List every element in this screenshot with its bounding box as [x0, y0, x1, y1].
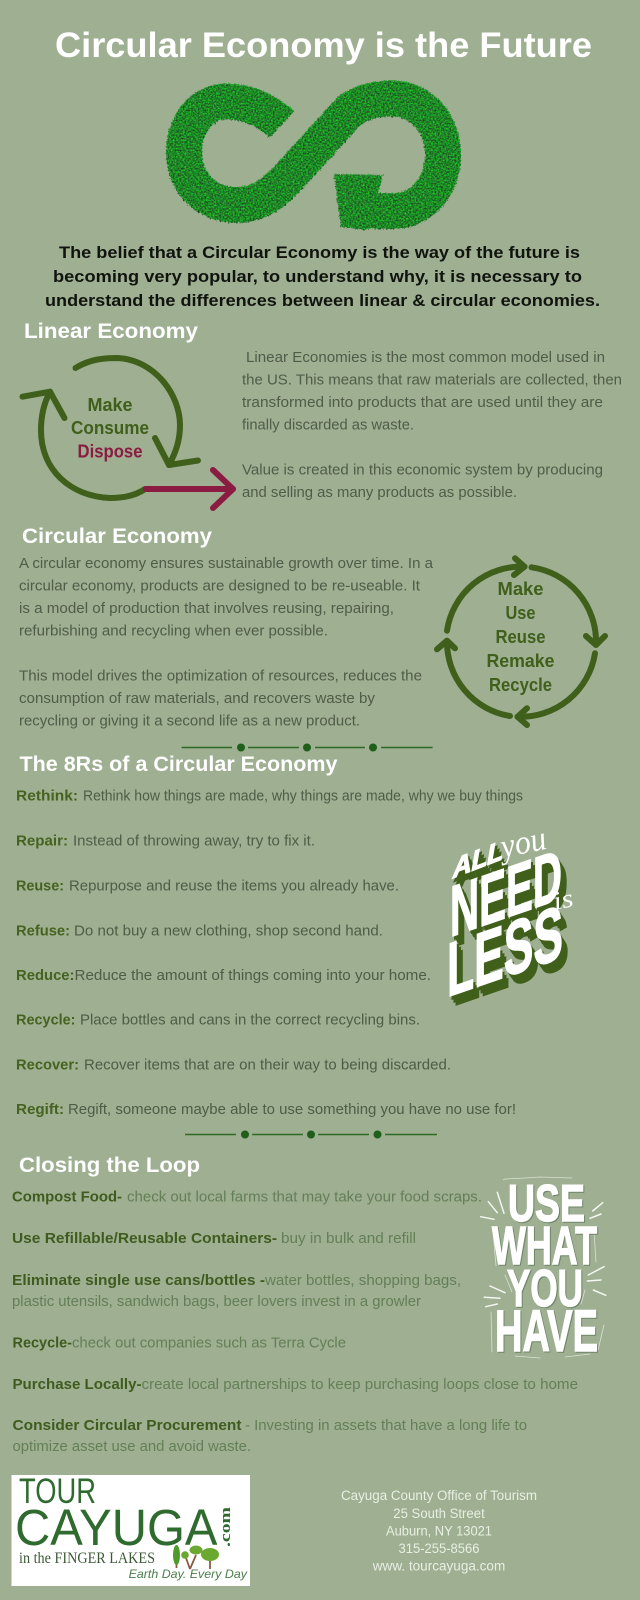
item: reduce: Reduce the amount of things coming into your home.: [74, 967, 431, 984]
contact details: 25 South Street: [393, 1506, 485, 1521]
diagram labels: Reuse: [496, 627, 546, 647]
diagram labels: [71, 395, 149, 462]
text: linear economy description: [242, 349, 622, 501]
diagram labels: Make: [88, 395, 132, 415]
text: linear economy description: Value is created in this economic system by producing: [242, 462, 603, 478]
lettering: all you need is less: LESS: [447, 888, 563, 1014]
item: circular procurement: optimize asset use and avoid waste.: [12, 1438, 251, 1455]
item: circular procurement: [12, 1417, 527, 1455]
intro paragraph: understand the differences between linear & circular economies.: [45, 291, 600, 310]
heading: closing the loop: Closing the Loop: [19, 1154, 200, 1177]
lettering: script words: [494, 820, 576, 916]
diagram labels: [486, 579, 554, 695]
diagram labels: Recycle: [489, 675, 552, 695]
item: reuse: Reuse:: [16, 878, 64, 894]
item: eliminate single use: Eliminate single use cans/bottles -: [12, 1272, 265, 1289]
logo: tour cayuga: in the FINGER LAKES: [19, 1550, 155, 1567]
item: purchase locally: create local partnerships to keep purchasing loops close to home: [142, 1376, 578, 1393]
text: linear economy description: the US. This means that raw materials are collected, then: [242, 372, 622, 388]
diagram labels: Make: [498, 579, 544, 599]
item: recycle: Recycle:: [16, 1012, 76, 1028]
intro paragraph: becoming very popular, to understand why, it is necessary to: [53, 267, 582, 286]
words: YOU: [507, 1260, 583, 1318]
words: USE: [508, 1175, 585, 1233]
item: refuse: Do not buy a new clothing, shop second hand.: [74, 922, 383, 940]
item: eliminate single use: [12, 1272, 461, 1310]
item: repair: Instead of throwing away, try to fix it.: [73, 832, 315, 850]
lettering: use what you have: [481, 1175, 606, 1364]
icon: trees: [173, 1545, 219, 1569]
text: circular economy description: consumption of raw materials, and recovers waste by: [19, 690, 375, 707]
contact details: Cayuga County Office of Tourism: [341, 1488, 537, 1503]
item: recover: Recover:: [16, 1056, 79, 1074]
logo: tour cayuga: TOUR: [19, 1472, 96, 1511]
item: compost food: Compost Food-: [12, 1189, 122, 1206]
panel: circular economy: [19, 525, 605, 730]
logo: tour cayuga: CAYUGA: [15, 1499, 218, 1556]
lettering: all you need is less: ALL: [452, 835, 503, 884]
intro paragraph: The belief that a Circular Economy is the way of the future is: [59, 243, 580, 262]
diagram labels: Consume: [71, 418, 149, 438]
item: refuse: Refuse:: [16, 922, 70, 940]
rays: [481, 1177, 606, 1358]
title: Circular Economy is the Future: [55, 26, 592, 65]
icon: grass circular economy infinity arrow: [184, 98, 443, 230]
item: circular procurement: Consider Circular Procurement: [12, 1417, 242, 1434]
text: circular economy description: circular economy, products are designed to be re-useable. It: [19, 578, 421, 594]
lettering: all you need is less: [447, 833, 563, 1014]
item: purchase locally: Purchase Locally-: [12, 1376, 142, 1393]
lettering: script words: you: [494, 820, 550, 866]
item: recover: Recover items that are on their way to being discarded.: [84, 1056, 451, 1074]
heading: the 8Rs: The 8Rs of a Circular Economy: [20, 753, 338, 776]
item: eliminate single use: plastic utensils, sandwich bags, beer lovers invest in a growler: [12, 1293, 421, 1310]
item: regift: Regift, someone maybe able to use something you have no use for!: [68, 1101, 516, 1118]
panel: linear economy: [22, 320, 622, 508]
text: circular economy description: A circular economy ensures sustainable growth over time. In a: [19, 555, 434, 572]
diagram labels: Dispose: [78, 442, 142, 462]
text: circular economy description: recycling or giving it a second life as a new product.: [19, 712, 360, 730]
item: refillable containers: Use Refillable/Reusable Containers-: [12, 1230, 277, 1247]
contact details: [341, 1488, 537, 1574]
item: compost food: check out local farms that may take your food scraps.: [127, 1189, 482, 1206]
item: repair: Repair:: [16, 832, 68, 850]
item: refillable containers: [12, 1230, 416, 1247]
item: reduce: Reduce:: [16, 967, 74, 984]
text: linear economy description: finally discarded as waste.: [242, 416, 414, 434]
panel: the 8Rs: [16, 753, 523, 1118]
text: linear economy description: and selling as many products as possible.: [242, 484, 517, 501]
contact details: www. tourcayuga.com: [372, 1558, 505, 1574]
lettering: script words: is: [550, 883, 576, 916]
item: refillable containers: buy in bulk and refill: [281, 1230, 416, 1247]
text: linear economy description: Linear Economies is the most common model used in: [246, 349, 605, 366]
item: recycle: Recycle-: [12, 1334, 72, 1352]
diagram: linear economy arrows: [22, 358, 233, 508]
item: regift: Regift:: [16, 1101, 64, 1118]
text: circular economy description: is a model of production that involves reusing, repairing,: [19, 600, 394, 617]
contact details: 315-255-8566: [398, 1541, 480, 1556]
text: circular economy description: refurbishing and recycling when ever possible.: [19, 622, 328, 640]
intro paragraph: [45, 243, 600, 310]
logo: tour cayuga: [12, 1472, 250, 1586]
words: [492, 1175, 598, 1364]
text: linear economy description: transformed into products that are used until they are: [242, 394, 603, 411]
item: reuse: Repurpose and reuse the items you already have.: [69, 878, 399, 894]
text: circular economy description: This model drives the optimization of resources, reduces the: [19, 668, 422, 684]
heading: linear economy: Linear Economy: [24, 320, 198, 343]
item: rethink: Rethink:: [16, 788, 78, 804]
item: recycle: Place bottles and cans in the correct recycling bins.: [80, 1012, 420, 1028]
diagram labels: Use: [506, 603, 536, 623]
diagram: circular arrows: [437, 558, 605, 725]
text: circular economy description: [19, 555, 434, 730]
diagram labels: Remake: [486, 651, 554, 671]
panel: closing the loop: [12, 1154, 578, 1455]
item: eliminate single use: water bottles, shopping bags,: [264, 1272, 461, 1289]
logo: tour cayuga: .com: [218, 1506, 234, 1547]
item: circular procurement: - Investing in assets that have a long life to: [245, 1417, 527, 1434]
contact details: Auburn, NY 13021: [386, 1524, 492, 1538]
item: recycle: check out companies such as Terra Cycle: [72, 1334, 346, 1352]
item: rethink: Rethink how things are made, why things are made, why we buy things: [83, 788, 523, 804]
logo: tour cayuga: Earth Day. Every Day: [129, 1567, 248, 1581]
heading: circular economy: Circular Economy: [22, 525, 212, 548]
